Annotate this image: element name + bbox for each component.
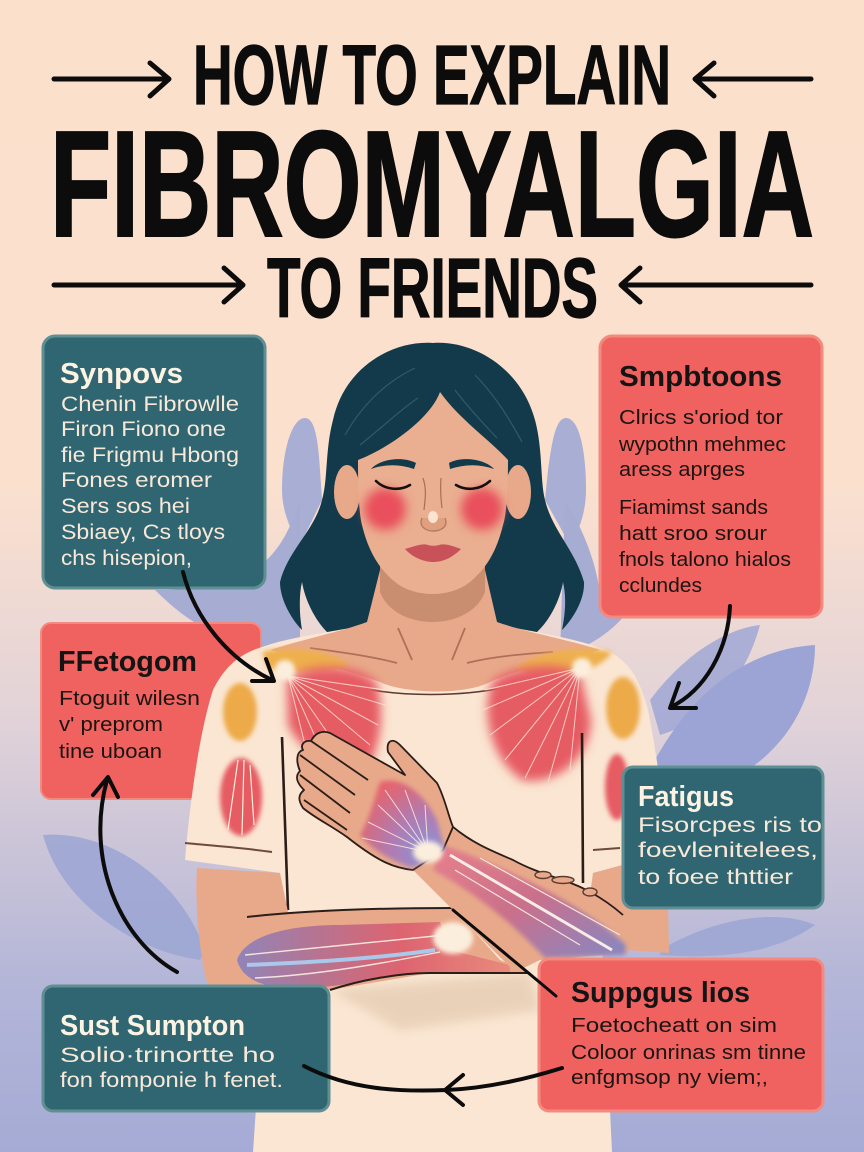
panel: synopsis: Synpovs xyxy=(60,358,183,390)
panel: synopsis: chs hisepion, xyxy=(61,547,192,570)
panel: fatigue right: foevlenitelees, xyxy=(638,839,818,862)
ears xyxy=(334,465,531,519)
panel: symptoms: cclundes xyxy=(619,574,702,597)
sleeve heat orange right xyxy=(606,677,640,739)
shirt xyxy=(185,625,667,1152)
shoulder heat orange band right xyxy=(515,649,612,676)
panel: symptoms: hatt sroo srour xyxy=(619,522,767,545)
mouth xyxy=(405,544,461,562)
shirt fold lines xyxy=(185,733,620,910)
neckline xyxy=(357,687,507,694)
panel: symptoms: Clrics s'oriod tor xyxy=(619,406,783,429)
chest heat rays xyxy=(288,668,580,782)
title arrows xyxy=(54,63,811,302)
chest heat right xyxy=(487,666,591,781)
cheeks xyxy=(364,488,503,530)
panel: symptoms: wypothn mehmec xyxy=(618,433,786,456)
panel: fatigue right: to foee thttier xyxy=(638,866,793,889)
panel: synopsis: Chenin Fibrowlle xyxy=(61,393,239,416)
panel: fatigue left: v' preprom xyxy=(59,713,163,736)
neck shadow xyxy=(380,560,485,622)
eyes closed xyxy=(376,481,490,489)
upper forearm xyxy=(413,823,628,971)
lower forearm glow xyxy=(433,922,473,954)
chest heat left xyxy=(287,667,381,770)
sleeve rays xyxy=(228,760,254,835)
collar and neck lines xyxy=(310,628,553,663)
panel: fatigue left: tine uboan xyxy=(59,740,162,763)
shirt shadow under arm xyxy=(330,973,540,1030)
panel: fatigue left xyxy=(41,623,261,799)
lower forearm pain pattern xyxy=(237,922,510,988)
finger lines xyxy=(300,741,368,830)
panel: fatigue left: FFetogom xyxy=(58,646,197,678)
panel: fatigue right xyxy=(623,767,823,908)
panel: support left: Sust Sumpton xyxy=(60,1010,245,1042)
left arm and lower forearm xyxy=(196,868,530,1003)
panel: support right: Suppgus lios xyxy=(571,977,750,1009)
face xyxy=(358,392,508,594)
decorative leaves xyxy=(43,418,815,960)
hand xyxy=(297,732,453,870)
title xyxy=(50,28,814,335)
panel: synopsis xyxy=(43,336,265,588)
hair xyxy=(280,343,584,632)
hand pain fan xyxy=(360,781,445,868)
panel: symptoms xyxy=(600,336,822,617)
panel: synopsis: Fones eromer xyxy=(61,469,212,492)
panel: fatigue right: Fisorcpes ris to xyxy=(638,814,822,837)
panel: support right: enfgmsop ny viem;, xyxy=(571,1066,768,1089)
panel: support right xyxy=(539,959,823,1111)
panel: symptoms: Smpbtoons xyxy=(619,361,782,393)
sleeve heat orange left xyxy=(223,683,257,741)
skin neck and chest xyxy=(270,570,600,691)
panel: synopsis: fie Frigmu Hbong xyxy=(61,444,239,467)
panel: synopsis: Firon Fiono one xyxy=(61,418,226,441)
forearm top outline xyxy=(453,827,623,915)
shoulder heat orange band left xyxy=(262,649,350,673)
eyebrows xyxy=(371,459,494,469)
shoulder glow xyxy=(275,658,592,680)
panel: symptoms: Fiamimst sands xyxy=(619,496,768,519)
sleeve heat left xyxy=(220,758,262,836)
panel: support left: Solio·trinortte ho xyxy=(60,1044,275,1067)
forearm outlines xyxy=(247,908,530,990)
panel: symptoms: aress aprges xyxy=(619,458,745,481)
panel: synopsis: Sers sos hei xyxy=(61,495,190,518)
panel: symptoms: fnols talono hialos xyxy=(619,548,791,571)
panel: synopsis: Sbiaey, Cs tloys xyxy=(61,521,225,544)
panel: fatigue left: Ftoguit wilesn xyxy=(59,687,200,710)
sleeve heat right xyxy=(605,754,629,820)
fingertips on arm xyxy=(535,872,597,896)
panel: support right: Foetocheatt on sim xyxy=(571,1014,777,1037)
right upper arm xyxy=(590,853,669,953)
panel: support right: Coloor onrinas sm tinne xyxy=(571,1041,806,1064)
panel: support left xyxy=(43,986,329,1111)
panel: support left: fon fomponie h fenet. xyxy=(60,1069,283,1092)
nose xyxy=(421,478,446,531)
upper forearm pain pattern xyxy=(433,845,626,958)
title line 3: TO FRIENDS xyxy=(267,241,598,335)
person xyxy=(185,343,669,1152)
panel: fatigue right: Fatigus xyxy=(638,781,734,813)
arrows between panels xyxy=(93,572,730,1105)
